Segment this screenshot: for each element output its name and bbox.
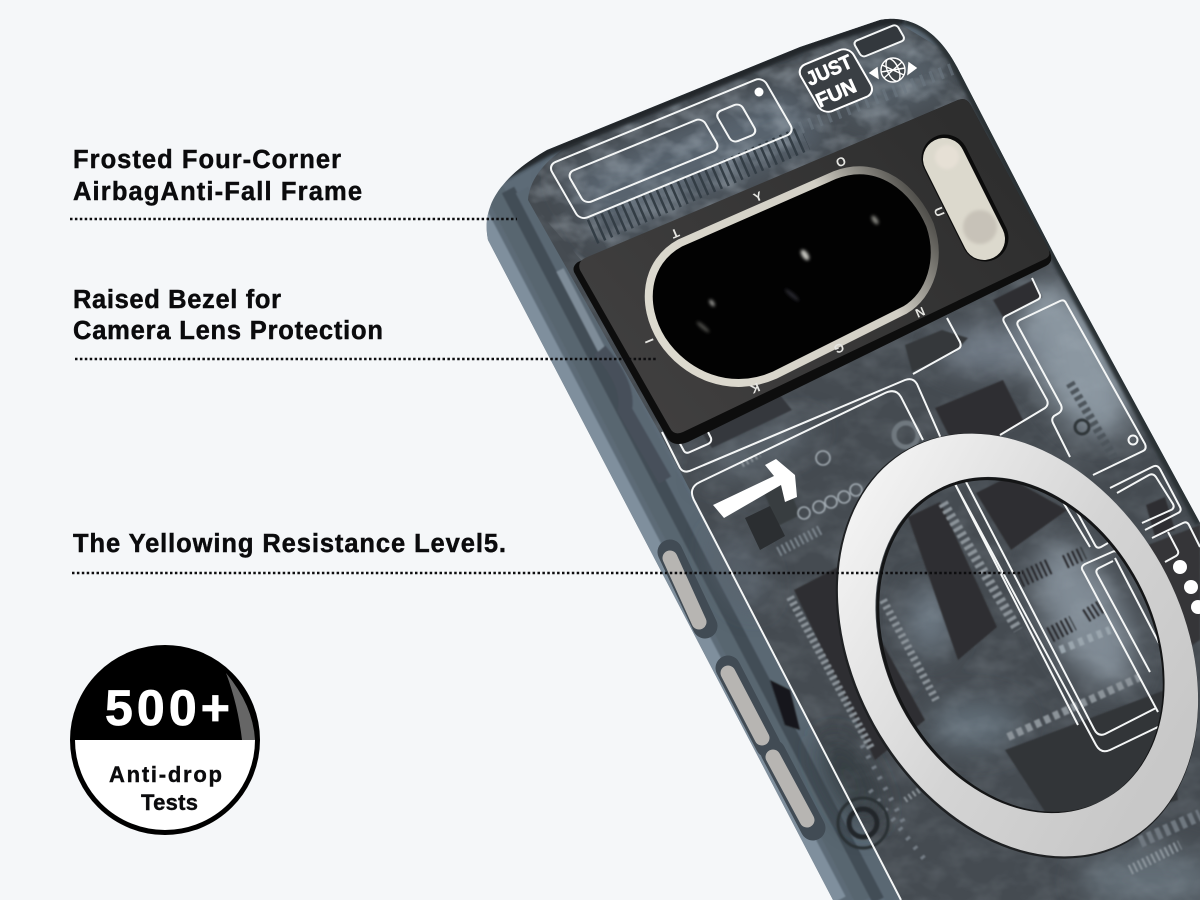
callout: raised bezel: Raised Bezel for	[73, 286, 281, 314]
lens bezel lettering: U	[931, 205, 947, 219]
white printed outlines	[548, 77, 1200, 900]
lens bezel lettering: I	[642, 337, 656, 345]
badge: 500+ anti-drop tests	[72, 648, 258, 832]
circuit board plate	[528, 15, 1200, 900]
frosted top strip texture	[529, 26, 969, 260]
lens bezel lettering: K	[748, 380, 762, 396]
lens bezel lettering: G	[832, 340, 846, 356]
brand logo: JUST FUN: JUST	[803, 51, 856, 91]
brand logo: JUST FUN: FUN	[813, 75, 860, 113]
board tonal patches	[560, 40, 1200, 900]
badge: 500+ anti-drop tests: 500+	[105, 680, 230, 736]
small square components	[745, 506, 785, 550]
camera lens pill	[649, 170, 935, 383]
brand logo: JUST FUN	[796, 46, 876, 115]
lens bezel lettering: Y	[751, 189, 765, 205]
solder pads beside the arrow	[798, 420, 1089, 848]
icon: globe with arrows	[870, 57, 916, 83]
lens bezel lettering: O	[834, 154, 848, 170]
lens glints	[696, 214, 880, 334]
callout: raised bezel	[73, 286, 657, 359]
indicator dots	[754, 88, 1200, 614]
callout: frosted corner frame: Frosted Four-Corner	[73, 146, 341, 174]
comb texture below the top window	[592, 138, 805, 232]
lens bezel lettering: N	[913, 304, 927, 320]
lens bezel lettering	[642, 154, 947, 396]
dark chips	[700, 280, 1200, 835]
badge: 500+ anti-drop tests: Anti-drop	[109, 762, 222, 787]
icon: white arrow	[713, 459, 797, 518]
callout: raised bezel: Camera Lens Protection	[73, 317, 383, 345]
badge: 500+ anti-drop tests: Tests	[141, 790, 198, 815]
camera bar	[574, 99, 1051, 444]
callout: frosted corner frame: AirbagAnti-Fall Frame	[73, 178, 362, 206]
callout: frosted corner frame	[70, 146, 517, 219]
phone with protective case	[468, 0, 1200, 900]
flash module	[945, 158, 985, 238]
chip pins	[742, 383, 1200, 870]
case body	[468, 0, 1200, 900]
magnetic charging ring	[765, 371, 1200, 900]
small label window	[853, 24, 905, 58]
callout: yellowing resistance: The Yellowing Resistance Level5.	[73, 530, 506, 558]
mottled surface texture	[500, 0, 1200, 900]
side buttons	[670, 552, 813, 828]
lens bezel lettering: T	[668, 225, 681, 241]
